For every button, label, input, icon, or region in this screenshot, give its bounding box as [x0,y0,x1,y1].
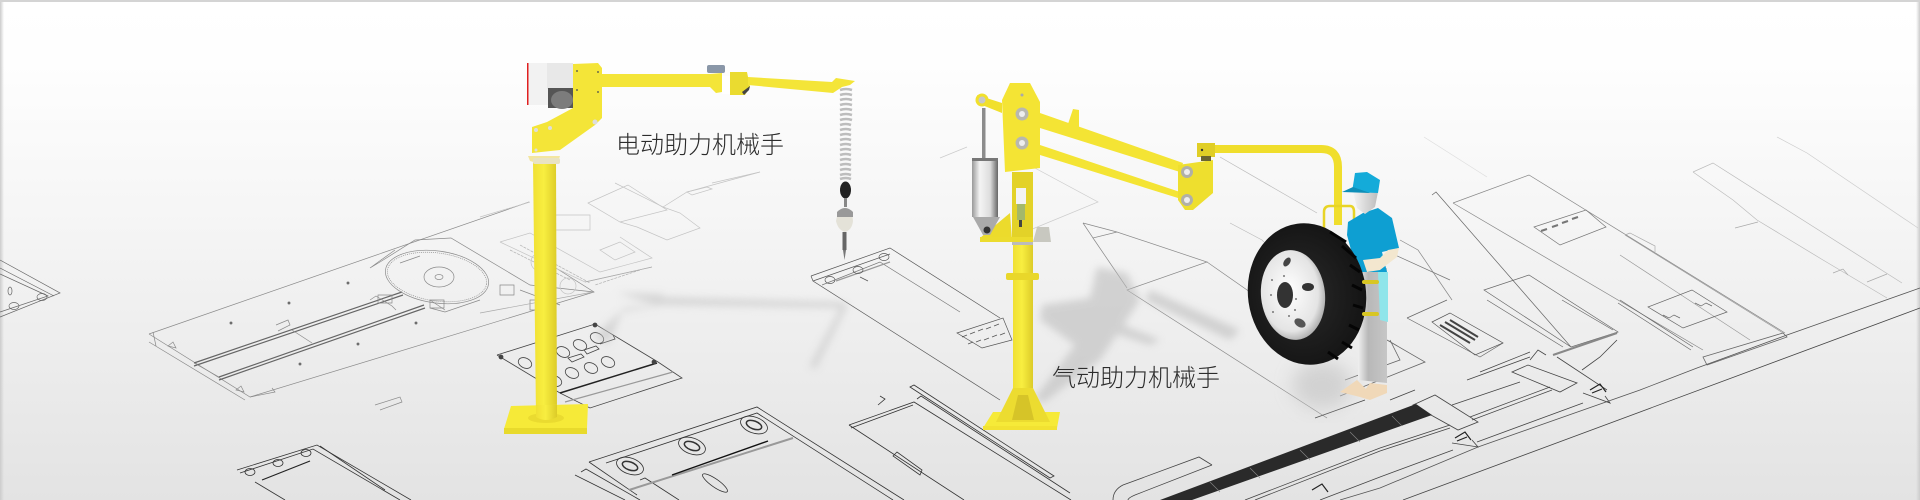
worker [1340,172,1399,400]
pneumatic assist manipulator [972,83,1354,430]
label: pneumatic assist manipulator: 气动助力机械手 [1052,365,1220,392]
blueprint drawing: lower-centre plates [575,385,1071,500]
shadow: pneumatic arm [1035,267,1240,403]
lower pole [1013,243,1033,400]
blueprint drawing: conveyor plate with disk [149,202,594,410]
blueprint drawing: lower-left plate [237,445,411,500]
arm [1363,248,1399,272]
blueprint drawing: left fragment [0,260,60,317]
joint [707,65,750,95]
rim [1256,247,1330,343]
blueprint drawing: control panel [497,323,682,408]
blueprint drawing: upper plate [811,248,1000,400]
lift frame [1324,206,1354,246]
spring cable [840,89,852,179]
flange [528,156,560,164]
tire [1239,215,1375,373]
label: electric assist manipulator: 电动助力机械手 [616,132,784,159]
motor housing [527,63,573,109]
screwdriver [836,198,853,260]
top plate bolts [1016,94,1028,150]
hub and holes [1270,256,1314,329]
swivel block [1197,143,1215,161]
air filter [1016,188,1026,227]
second arm [748,77,855,93]
electric assist manipulator [504,63,855,434]
first arm [602,73,722,93]
lever [976,94,1002,113]
blueprint drawing: dense rack [1160,404,1432,500]
cylinder [972,108,1000,235]
pole [533,162,557,417]
top plate [1002,83,1040,172]
end plate bolts [1181,166,1193,206]
hoist handle [840,182,851,198]
upper pole [1012,172,1033,243]
tube arm [1215,149,1338,225]
end plate [1178,160,1213,210]
blueprint drawing: faded machinery [480,172,760,313]
blueprint drawing: right machine plates [1370,137,1918,357]
collar [1006,273,1039,280]
gripper bracket [1362,272,1388,322]
blueprint drawing: tilted tray [940,147,1327,418]
shadow: electric arm [595,293,848,370]
shadow: tire and worker [1292,361,1352,409]
gusset and flange [980,213,1051,245]
blueprint drawing: small button panel [957,318,1012,348]
bracket [532,63,602,153]
blueprint drawing: rails and long lines [1113,288,1920,500]
shoes [1340,380,1387,400]
parallel arms [1040,109,1183,198]
trousers [1358,268,1387,383]
tread [1328,232,1363,359]
base plate [504,404,588,434]
bolts [534,70,599,152]
head [1353,192,1378,214]
base with gussets [983,388,1060,430]
cap [1342,172,1380,193]
shirt [1347,208,1399,272]
